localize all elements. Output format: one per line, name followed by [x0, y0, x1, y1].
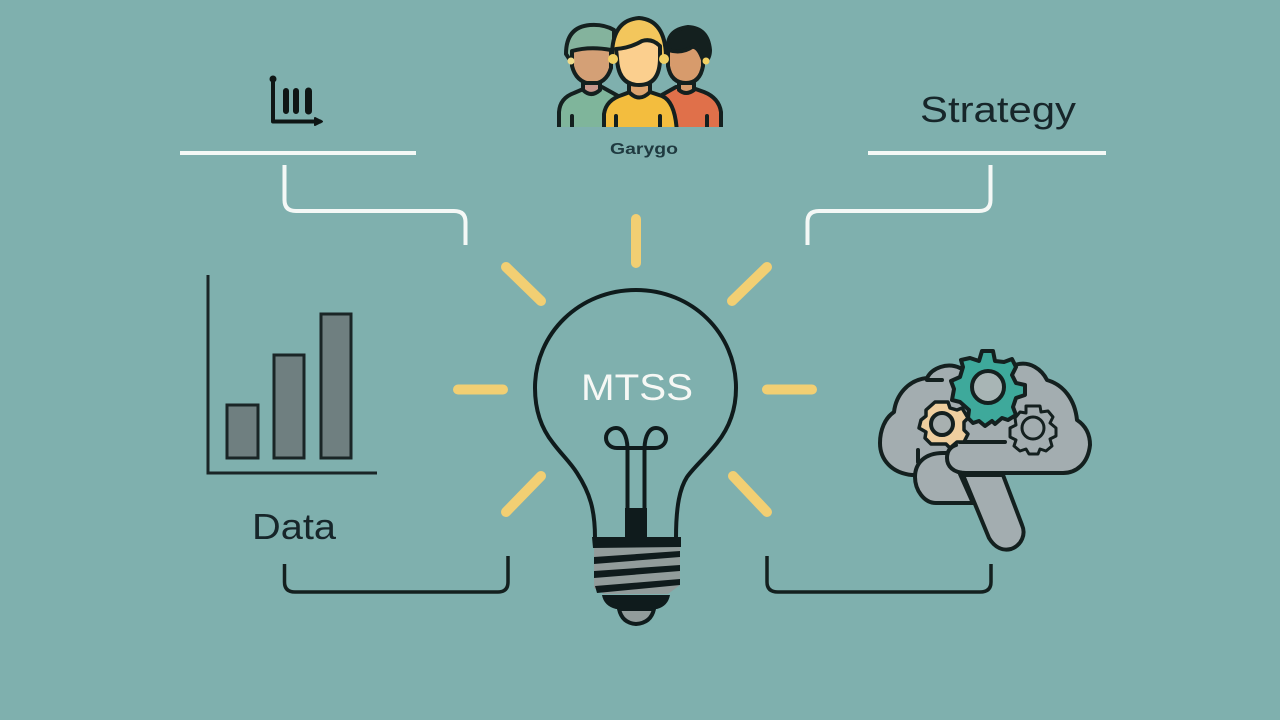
brain stem	[963, 475, 1024, 550]
base cap	[602, 595, 670, 609]
heading rule: right	[868, 151, 1106, 155]
person: left	[559, 25, 620, 135]
bar 2	[274, 355, 304, 458]
heading: Strategy: Strategy	[920, 89, 1076, 130]
heading rule: left	[180, 151, 416, 155]
light rays	[458, 219, 812, 512]
person: centre	[604, 18, 677, 135]
bar 3	[321, 314, 351, 458]
title: MTSS: MTSS	[581, 367, 693, 408]
bracket: bottom right	[767, 556, 991, 592]
person: right	[660, 27, 721, 135]
bulb outline	[535, 290, 736, 538]
gear: teal	[951, 351, 1025, 426]
gear: grey	[1010, 406, 1056, 454]
axes	[208, 275, 377, 473]
bracket: bottom left	[284, 556, 508, 592]
brain	[880, 364, 1090, 475]
label: Data: Data	[252, 506, 337, 547]
filament	[606, 428, 666, 510]
icon: light bulb	[535, 290, 736, 624]
icon: small bar chart	[270, 76, 322, 125]
icon: team of three people	[559, 18, 721, 135]
brain upper fold	[949, 445, 1063, 471]
people caption: Garygo	[610, 141, 678, 158]
filament stem	[625, 508, 647, 540]
connector: top right	[808, 165, 990, 245]
icon: brain with gears	[880, 351, 1090, 550]
bar chart: data	[208, 275, 377, 473]
bar 1	[227, 405, 258, 458]
gear: orange	[919, 402, 968, 448]
connector: top left	[284, 165, 466, 245]
brain lower lobe	[915, 453, 973, 503]
screw base	[594, 538, 680, 594]
